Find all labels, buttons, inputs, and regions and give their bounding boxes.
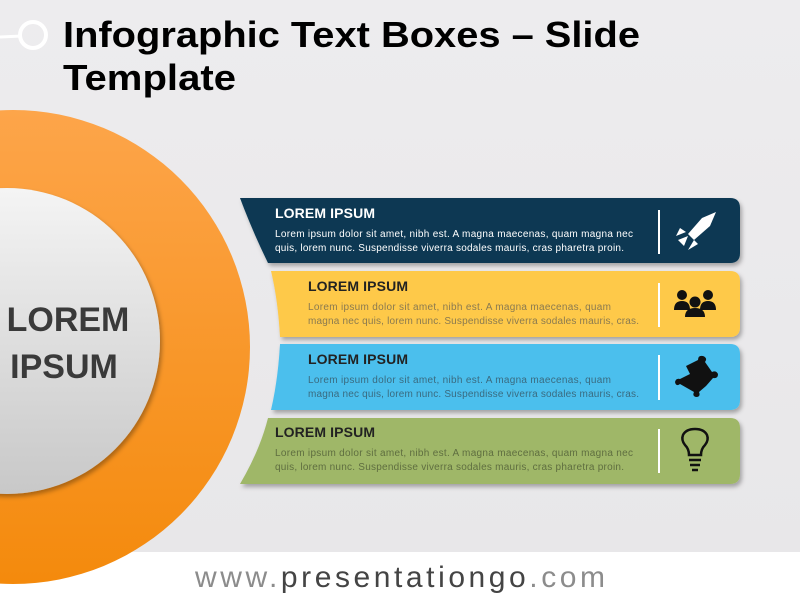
panel: box 1 [240,198,740,263]
panel: box 1: Lorem ipsum dolor sit amet, nibh est. A magna maecenas, quam magna nec [275,229,633,240]
panel: box 4: Lorem ipsum dolor sit amet, nibh est. A magna maecenas, quam magna nec [275,448,633,459]
panel: box 4: quis, lorem nunc. Suspendisse viverra sodales mauris, cras pharetra proin. [275,462,624,473]
panel: box 3: magna nec quis, lorem nunc. Suspendisse viverra sodales mauris, cras. [308,389,639,400]
footer: www.presentationgo.com [194,561,605,594]
title: Template [63,57,236,98]
icon: people [674,290,716,317]
circle: orange ring: IPSUM [10,348,118,386]
circle: orange ring [0,110,250,584]
panel: box 2: LOREM IPSUM [308,278,408,294]
icon: puzzle [675,356,718,397]
panel: box 1: LOREM IPSUM [275,205,375,221]
panel: box 2: magna nec quis, lorem nunc. Suspendisse viverra sodales mauris, cras. [308,316,639,327]
circle: orange ring: LOREM [7,301,129,339]
panel: box 1: quis, lorem nunc. Suspendisse viverra sodales mauris, cras pharetra proin. [275,243,624,254]
icon: rocket [676,212,716,250]
panel: box 4 [240,418,740,484]
panel: box 3: LOREM IPSUM [308,351,408,367]
panel: box 2: Lorem ipsum dolor sit amet, nibh est. A magna maecenas, quam [308,302,611,313]
panel: box 3: Lorem ipsum dolor sit amet, nibh est. A magna maecenas, quam [308,375,611,386]
title [0,14,640,98]
panel: box 4: LOREM IPSUM [275,424,375,440]
title: Infographic Text Boxes – Slide [63,14,640,55]
icon: lightbulb [682,429,708,470]
footer [0,552,800,600]
panel: box 2 [271,271,740,337]
panel: box 3 [271,344,740,410]
